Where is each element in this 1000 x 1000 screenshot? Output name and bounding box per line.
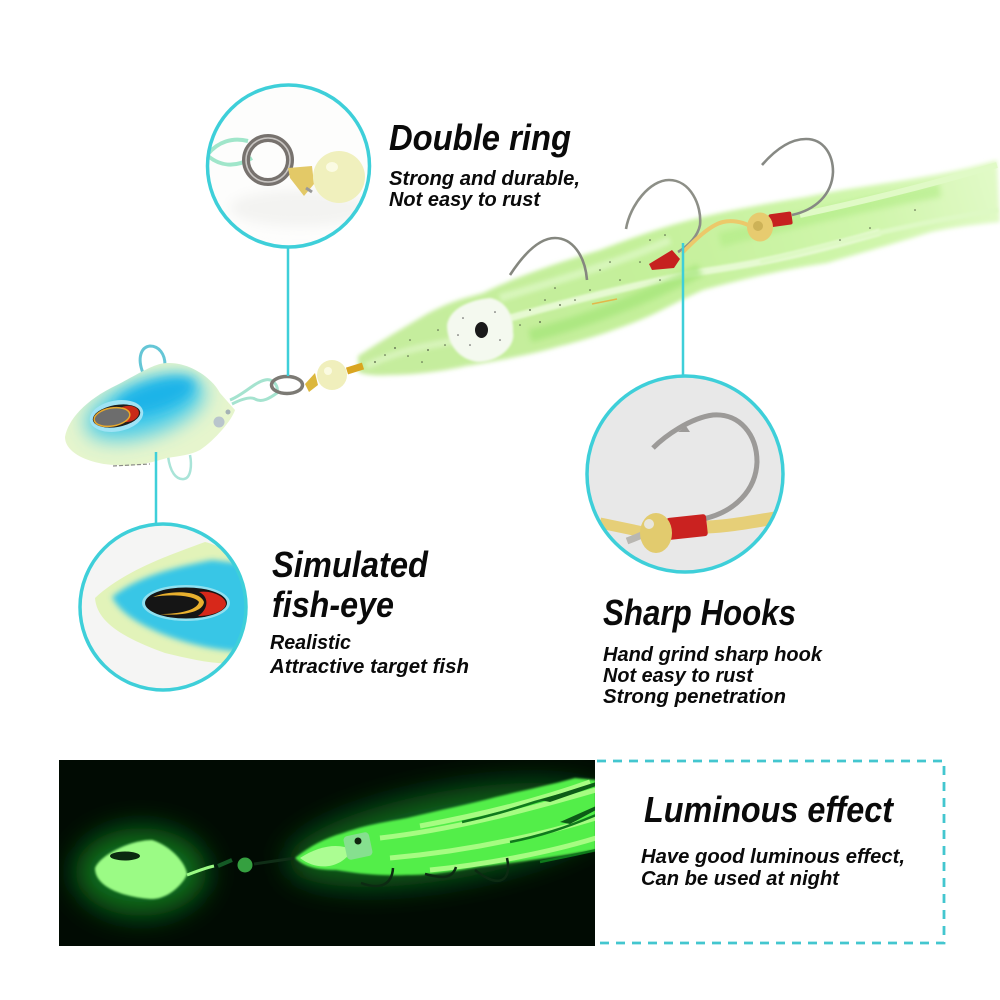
callout line: double ring [287,248,289,376]
text: fish-eye description [269,631,469,678]
circle: fish-eye detail [80,524,255,690]
heading: simulated fish-eye [272,544,429,625]
lure: squid skirt body [358,160,1000,375]
hook 1 on squid [510,238,587,280]
text: luminous description: Have good luminous effect, [641,845,905,868]
text: luminous description [641,845,905,890]
lure: squid eye patch [447,298,513,362]
callout line: simulated fish-eye [155,452,157,524]
text: sharp hooks description [603,643,824,708]
lure: gold wire, bead and double ring [230,360,363,404]
text: double ring description [389,167,580,211]
text: sharp hooks description: Not easy to rust [603,664,754,687]
text: sharp hooks description: Strong penetration [603,685,786,708]
text: sharp hooks description: Hand grind sharp hook [603,643,824,666]
text: luminous description: Can be used at night [641,867,840,890]
text: fish-eye description: Attractive target fish [269,655,469,678]
heading: sharp hooks: Sharp Hooks [603,592,796,633]
glow: squid [295,778,596,886]
panel: dashed box [597,761,944,943]
circle: double ring detail [208,85,370,247]
heading: luminous effect: Luminous effect [644,789,895,830]
text: fish-eye description: Realistic [270,631,352,654]
heading: double ring: Double ring [389,117,571,158]
panel: luminous photo [59,760,620,946]
heading: simulated fish-eye: Simulated [272,544,429,585]
heading: simulated fish-eye: fish-eye [272,584,394,625]
hook 2 with red wrap [626,180,748,270]
text: double ring description: Strong and durable, [389,167,580,190]
lure: jig head [65,346,235,479]
hook 3 with knot and red wrap [747,139,833,242]
callout line: sharp hooks [682,243,684,375]
glow: jig head [95,840,295,899]
text: double ring description: Not easy to rust [389,188,541,211]
circle: sharp hook detail [587,376,783,572]
